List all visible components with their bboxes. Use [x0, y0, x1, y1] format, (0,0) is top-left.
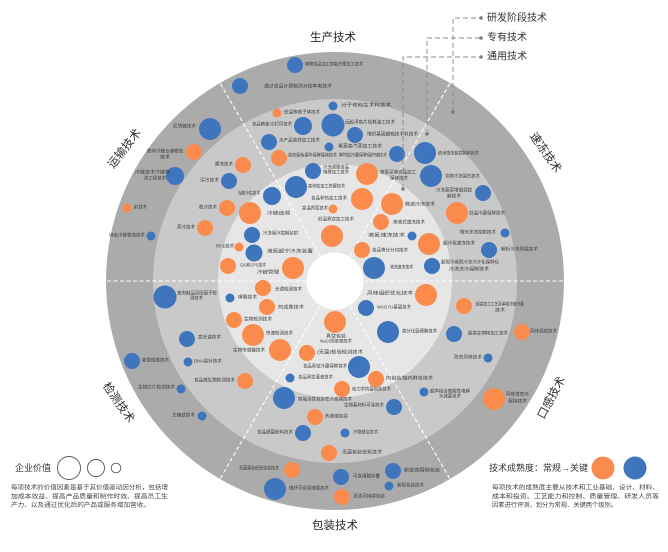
bubble: 食品细菌粉料: 食品细菌粉料技术	[257, 428, 293, 436]
text block: 技术成熟度说明: 每项技术的成熟度主要从技术和工业基础、设计、材料、	[492, 484, 659, 492]
bubble: 冷冻保冷控制: 冷冻保冷控制装射	[263, 230, 298, 236]
bubble: 高温界回: 高温界回技术	[302, 204, 328, 212]
bubble: 生物检测	[226, 312, 272, 328]
bubble: 液流速冻: 液流速冻技术	[390, 264, 413, 270]
bubble: 生物传感器	[233, 339, 291, 361]
bubble: 区块链	[173, 118, 221, 140]
bubble: 冷冻调理食品	[305, 163, 349, 179]
bubble: 绿色冷链物流: 绿色冷链物流技术	[109, 232, 145, 238]
text block: 技术成熟度说明	[492, 484, 659, 509]
bubble: 数冷	[199, 200, 235, 216]
heading: 生产技术: 生产技术	[310, 30, 356, 44]
text block: 企业价值说明: 产力、以及通过优化后的产品或服务增加营收。	[11, 501, 150, 509]
text block: 企业价值说明: 每项技术的价值因素是基于其价值驱动因分析，包括增	[11, 484, 168, 492]
bubble: 食品真空冷藏: 食品真空冷藏保鲜技术	[303, 362, 347, 370]
bubble: RFID	[216, 242, 244, 252]
bubble: 液氮超宁冷冻	[246, 244, 313, 262]
bubble: 无菌包装低氧	[321, 445, 382, 461]
bubble: 食品真空灌液: 食品真空灌液技术	[298, 374, 333, 380]
bubble: 低温等离子体	[272, 108, 320, 118]
bubble: 超限冷缘: 超限冷缘防冷冻冷冷化保鲜化	[441, 258, 499, 266]
bubble: 嗅眼	[226, 294, 257, 302]
bubble: 当数冷生: 当数冷生技术	[238, 190, 260, 196]
bubble: 食品细菌粉料	[257, 425, 311, 441]
bubble: 当数冷生	[238, 190, 261, 224]
bubble: 超声结合微酸性电解水	[420, 388, 470, 400]
bubble: RFID: RFID技术	[216, 242, 234, 250]
bubble: 改进风味: 改进风味技术	[454, 354, 482, 360]
bubble: 超冷氢速冻	[418, 233, 475, 255]
bubble: 超声结合微酸性电解水: 超声结合微酸性电解	[430, 388, 470, 394]
bubble: 深冷: 深冷技术	[200, 176, 219, 184]
bubble: 超冷氢速冻: 超冷氢速冻技术	[443, 240, 475, 246]
bubble: 超高加工工艺	[456, 298, 524, 314]
bubble: 生物检测: 生物检测技术	[244, 316, 272, 322]
bubble: 超限冷缘: 冷冻冻冷保鲜技术	[449, 266, 489, 272]
bubble: 食品非热加工: 食品非热加工技术	[311, 194, 347, 202]
bubble: 通过食品计费	[232, 78, 332, 94]
bubble: 食品等分分切: 食品等分分切技术	[372, 246, 408, 254]
bubble: 液氮深液食品: 液氮深液食品加工	[380, 168, 416, 176]
bubble: 动力学抗菌: 动力学抗菌包装技术	[352, 386, 391, 392]
bubble: 微纤可食用	[264, 478, 329, 500]
bubble: 内包装: 内包装/独内鲜食技术	[386, 374, 433, 382]
bubble: DNA探针	[184, 358, 222, 366]
bubble: DNA探针: DNA探针技术	[194, 358, 222, 364]
bubble: 瞬冻: 瞬冻技术	[215, 160, 233, 168]
bubble: 鲜时控冷藏	[339, 146, 405, 162]
bubble: 射技术: 射技术	[134, 204, 147, 210]
bubble: 太赫兹: 太赫兹技术	[172, 412, 195, 418]
bubble: 微纤可食用: 微纤可食用液胆技术	[289, 484, 329, 492]
bubble: 冷冻调理食品: 冷冻调理食品	[323, 164, 349, 170]
bubble: 远胶浮鱼片: 远胶浮鱼片低耗油工技术	[345, 118, 395, 126]
bubble: 液氮速冻	[368, 232, 416, 240]
bubble: 食品真空灌液	[286, 374, 333, 382]
bubble: 麻辣食品加工	[287, 57, 363, 73]
bubble: 远胶浮鱼片	[322, 114, 395, 136]
bubble: 风味组织优化	[367, 284, 437, 306]
bubble: 食品微生物检测: 食品微生物检测技术	[194, 376, 235, 384]
bubble: 食品精准3D打印: 食品精准3D打印技术	[252, 120, 292, 128]
bubble: 冷物部位: 冷物部位技术	[353, 428, 378, 436]
bubble: 高效保色保鲜	[271, 150, 337, 166]
sector: 运输技术	[105, 118, 313, 279]
bubble: 食品等分分切	[354, 242, 408, 258]
bubble: 清洁可持续包装	[334, 489, 385, 505]
bubble: 真空包装: 真空包装	[326, 332, 346, 340]
bubble: 超高生物特加工: 超高生物特加工技术	[468, 330, 508, 336]
bubble: 生物芯片: 生物芯片检测技术	[138, 384, 175, 390]
bubble: 内包装	[368, 371, 433, 387]
text block: 技术成熟度说明: 因素进行评测，划分为常规、关键两个级别。	[492, 501, 617, 509]
label: 通用技术: 通用技术	[487, 50, 527, 62]
bubble: 区块链: 区块链技术	[173, 122, 196, 130]
bubble: 果蔬高汽蒸加工	[324, 142, 382, 152]
bubble: 冷物部位	[340, 428, 378, 438]
heading: 口感技术: 口感技术	[534, 373, 568, 421]
bubble: 新型包装	[384, 482, 424, 490]
bubble: 智能活性包装: 智能活性包装在冷高减技术	[298, 396, 352, 402]
bubble: 食物冷冻蛋白	[420, 165, 480, 187]
bubble: 高均粒加工: 高均粒加工关键技术	[308, 182, 345, 190]
bubble: 太赫兹	[172, 412, 206, 420]
bubble: 新型成像: 新型成像技术	[142, 356, 169, 364]
bubble: 液流速冻	[363, 257, 413, 279]
bubble: 无菌包装低氧: 无菌包装低氧技术	[342, 448, 382, 456]
bubble: 绿色冷链物流	[109, 232, 156, 240]
heading: 运输技术: 运输技术	[105, 126, 144, 171]
bubble: 水产品高效加工: 水产品高效加工技术	[279, 136, 320, 144]
bubble: 超高生物特加工	[446, 326, 508, 342]
bubble: 热成像: 热成像技术	[278, 304, 304, 310]
bubble: 超高加工工艺: 技术	[495, 306, 505, 314]
bubble: 新型成像	[124, 353, 169, 369]
bubble: 麻辣食品加工: 麻辣食品加工智能方便加工技术	[305, 60, 363, 68]
bubble: 鲜时控冷藏: 鲜时控冷藏保鲜保护储技术	[339, 152, 387, 158]
bubble: 超限冷缘	[424, 258, 499, 274]
bubble: 冷链技术: 流工程技术	[144, 174, 166, 182]
bubble: 可食用膜	[333, 469, 380, 485]
bubble: 微波冷冻: 微波冷冻技术	[405, 200, 435, 208]
leader legend: 技术阶段	[401, 11, 547, 191]
sector: 检测技术	[100, 280, 304, 426]
bubble: 液液式速冻	[373, 214, 425, 230]
bubble: 瞬冻	[215, 157, 251, 173]
bubble: 解析冷冻防腐: 解析冷冻防腐技术	[501, 246, 538, 252]
bubble: 数字冷链仓储	[147, 144, 202, 160]
bubble: 食品真空冷藏	[303, 356, 370, 378]
text block: 企业价值说明	[11, 484, 168, 509]
bubble: 真空包装: NaCl浓缩液技术	[320, 338, 352, 344]
bubble: 改进风味	[454, 354, 492, 362]
bubble: 热收缩包装	[307, 409, 348, 425]
bubble: 分子修前生术	[328, 102, 391, 110]
bubble: 解析冷冻防腐	[481, 242, 538, 258]
bubble: 风味发育与保持: 保持技术	[508, 398, 527, 404]
bubble: 真空包装	[320, 311, 352, 344]
bubble: 水产品高效加工	[261, 134, 320, 150]
bubble: GIS和CPS	[220, 258, 266, 274]
bubble: 超高加工工艺: 超高加工工艺及单核冷链冷藏	[476, 300, 524, 308]
label: 研发阶段技术: 研发阶段技术	[487, 11, 547, 24]
bubble: 低温真空加工	[318, 216, 354, 247]
text block: 企业价值说明: 加成本效益、提高产品质量和制作时效、提高员工生	[11, 492, 168, 500]
legend: 企业价值	[11, 456, 168, 509]
bubble: 分子修前生术: 分子修前生术料技术	[341, 102, 391, 108]
sector: 生产技术	[232, 30, 418, 247]
bubble: 高效保色保鲜: 高效保色保华保鲜保持技术	[288, 152, 337, 158]
bubble: 液氮深液食品	[356, 163, 416, 185]
bubble: 风味发育与保持	[483, 388, 529, 410]
bubble: 增织基因编辑	[347, 127, 418, 143]
text block: 技术成熟度说明: 成本和投资、工艺能力和控制、质量管理、研发人员等	[492, 492, 659, 500]
bubble: 微波冷冻	[381, 193, 435, 215]
bubble: 生物传感器: 生物传感器技术	[233, 346, 265, 354]
bubble: 液液式速冻: 液液式速冻技术	[393, 218, 425, 226]
bubble: 低温等离子体: 低温等离子体技术	[284, 108, 320, 116]
label: 专有技术: 专有技术	[487, 30, 527, 44]
bubble: 射技术	[122, 204, 147, 212]
bubble: 嗅眼: 嗅眼技术	[238, 294, 257, 300]
bubble: 禽肉制品风险因子	[154, 286, 217, 308]
bubble: 纳米感冻: 纳米感冻超控制料技术	[438, 150, 479, 156]
bubble: 风味调控	[514, 324, 557, 340]
bubble: 蒸冷	[177, 220, 213, 236]
bubble: 热成像	[259, 299, 304, 315]
bubble: 液氮速冻: 液氮速冻技术	[368, 232, 405, 238]
bubble: 冷冻蔬菜增值: 冷冻蔬菜增值调控	[436, 186, 472, 194]
bubble: 生物基材料: 生物基材料可涂技术	[344, 402, 384, 408]
bubble: 高分化蓝细胞: 高分化蓝细胞技术	[402, 328, 437, 334]
bubble: 可食用膜: 可食用膜折叠	[353, 472, 380, 480]
bubble: 数字冷链仓储: 数字冷链仓储物流	[147, 148, 183, 154]
bubble: 数字冷链仓储: 技术	[160, 154, 170, 160]
bubble: 深冷	[200, 173, 237, 189]
bubble: 食品精准3D打印	[252, 117, 312, 135]
bubble: 高光谱: 高光谱技术	[198, 334, 221, 340]
bubble: 新型高阻隔: 新型高阻隔包装	[404, 466, 440, 474]
bubble: 低温冷藏保鲜: 低温冷藏保鲜技术	[469, 210, 505, 216]
bubble: 冷冻保冷控制	[244, 227, 298, 243]
legend: 技术成熟度	[489, 456, 659, 509]
bubble: 高光谱	[179, 331, 221, 347]
bubble: 高温界回	[302, 204, 338, 214]
bubble: 冷冻调理食品: 特殊加工技术	[323, 168, 349, 176]
bubble: 低温冷藏保鲜	[446, 202, 505, 224]
bubble: 高均粒加工	[285, 176, 345, 198]
bubble: 风味发育与保持: 风味发育与	[506, 390, 529, 398]
bubble: 光谱检测	[255, 280, 302, 296]
bubble: 快速检测: 快速检测技术	[266, 330, 293, 336]
bubble: 高分化蓝细胞	[377, 321, 437, 343]
bubble: 微米冻冻控制	[460, 228, 510, 238]
bubble: 热收缩包装: 热收缩包装	[325, 412, 348, 420]
bubble: GIS和CPS: GIS和CPS技术	[240, 262, 266, 268]
bubble: 低温真空加工: 低温真空加工技术	[318, 216, 354, 222]
bubble: 数冷: 数冷技术	[199, 204, 217, 210]
bubble: 通过食品计费: 通过食品计费检测对控率电技术	[264, 82, 332, 90]
bubble: 液氮深液食品: 保鲜技术	[390, 174, 408, 182]
bubble: 新型高阻隔	[385, 463, 440, 479]
sector: 包装技术	[239, 311, 440, 532]
heading: 速冻技术: 速冻技术	[527, 130, 565, 176]
legend: 技术成熟度: 技术成熟度：常规→关键	[489, 462, 588, 473]
bubble: 光谱检测: 光谱检测技术	[275, 286, 302, 292]
heading: 检测技术: 检测技术	[100, 380, 138, 426]
bubble: 食物冷冻蛋白: 食物冷冻蛋白技术	[445, 172, 480, 180]
bubble: 新型包装: 新型包装技术	[397, 482, 424, 488]
bubble: 清洁可持续包装: 清洁可持续包装	[353, 492, 385, 500]
bubble: 生物芯片	[138, 384, 186, 394]
bubble: 检验检测	[299, 345, 363, 361]
bubble: 纳米感冻	[414, 142, 479, 164]
bubble: 风味调控: 风味调控技术	[530, 328, 557, 334]
heading: 包装技术: 包装技术	[312, 519, 358, 532]
bubble: 智能活性包装	[273, 387, 352, 409]
bubble: 超声结合微酸性电解水: 水减菌技术	[439, 392, 461, 400]
bubble: 微米冻冻控制: 微米冻冻控制技术	[460, 228, 496, 236]
bubble: 禽肉制品风险因子: 禽肉制品风险因子检	[177, 290, 217, 296]
bubble: 检验检测: (无菌)检验检测技术	[317, 348, 363, 356]
bubble: 快速检测	[242, 324, 293, 346]
bubble: 冷链管理	[257, 257, 304, 279]
bubble: 冷链追溯: 冷链追溯	[267, 210, 290, 216]
bubble: 冷冻蔬菜增值: 解技术	[447, 192, 461, 200]
legend: 企业价值: 企业价值	[15, 462, 51, 473]
bubble: 风味组织优化: 风味组织优化技术	[367, 290, 413, 296]
bubble: 冷冻蔬菜增值	[436, 185, 491, 201]
bubble: 冷链管理: 冷链管理	[257, 268, 279, 276]
bubble: 冷链追溯	[263, 187, 290, 216]
bubble: 蒸冷: 蒸冷技术	[177, 224, 195, 230]
bubble: WAGYU基因: WAGYU基因技术	[377, 304, 411, 310]
bubble: 冷链技术: 冷链技术冷链物	[135, 168, 170, 176]
bubble: 冷链技术	[135, 167, 184, 185]
bubble: 无菌灌装低氧	[239, 462, 300, 478]
bubble: 液氮超宁冷冻: 液氮超宁冷冻装置	[267, 248, 313, 254]
bubble: 果蔬高汽蒸加工: 果蔬高汽蒸加工技术	[338, 142, 382, 150]
sector: 速冻技术	[354, 130, 565, 279]
bubble: 生物基材料	[344, 399, 402, 415]
bubble: WAGYU基因	[358, 300, 411, 316]
bubble: 动力学抗菌	[334, 381, 391, 397]
bubble: 禽肉制品风险因子: 测技术	[190, 294, 203, 302]
bubble: 增织基因编辑: 增织基因编辑技术料技术	[367, 130, 418, 138]
bubble: 食品非热加工	[311, 188, 373, 210]
sector: 口感技术	[358, 284, 568, 421]
bubble: 无菌灌装低氧: 无菌灌装低氧包装技术	[239, 464, 279, 472]
radial chart background rings	[105, 52, 565, 510]
bubble: 食品微生物检测	[194, 373, 253, 389]
